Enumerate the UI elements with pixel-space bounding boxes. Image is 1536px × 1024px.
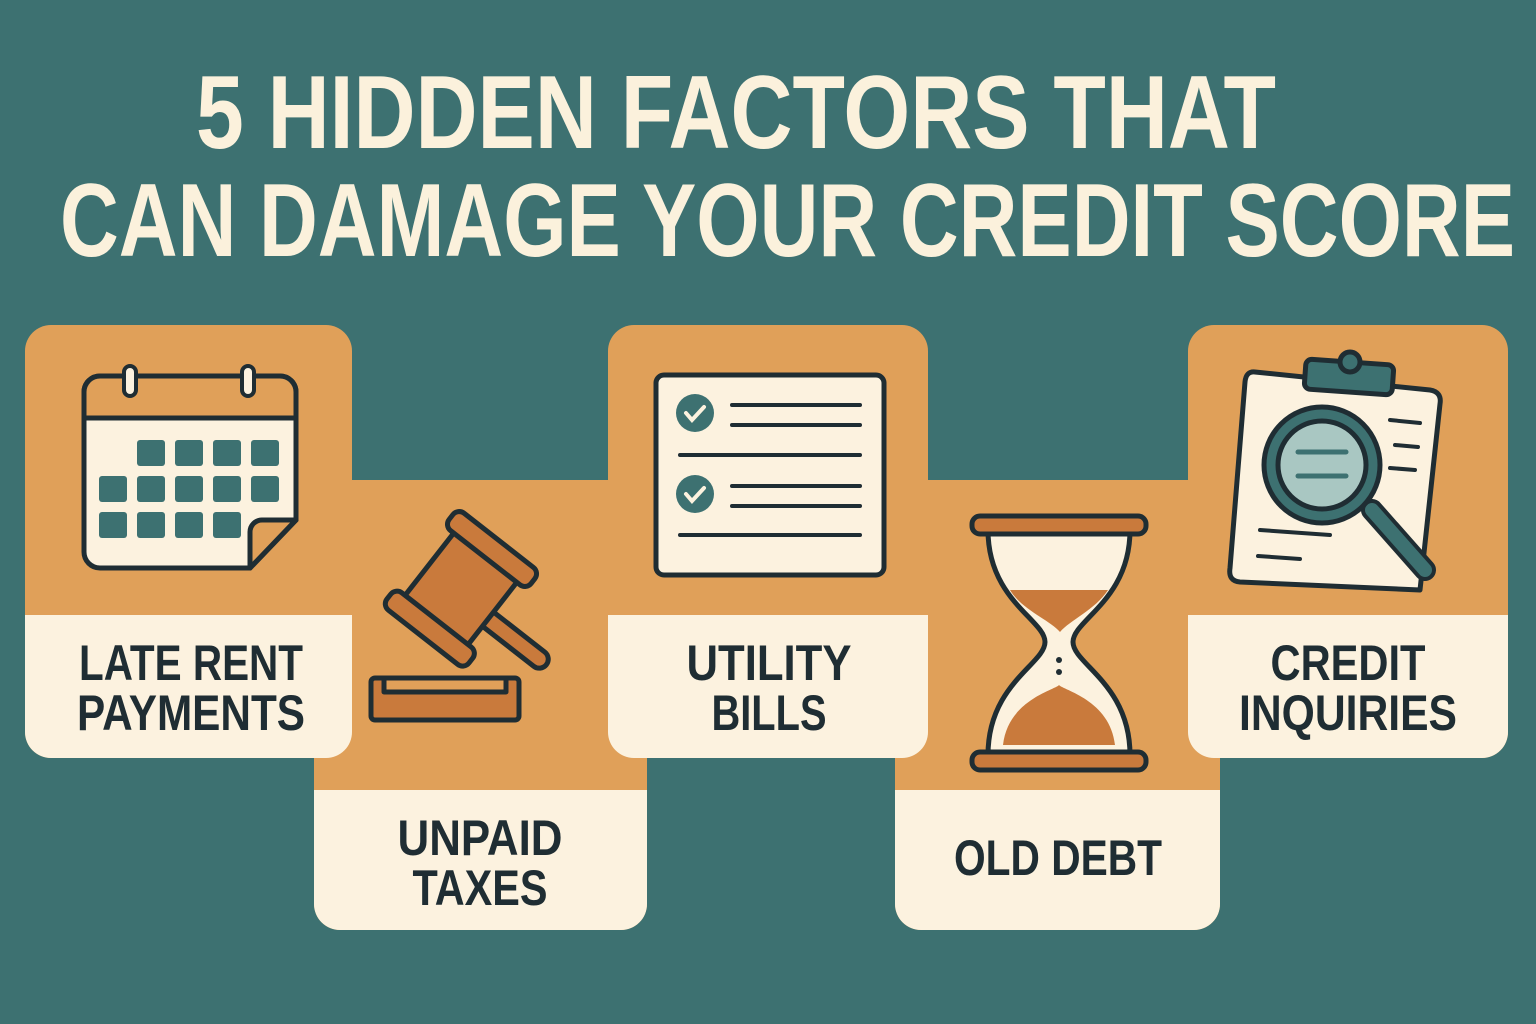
icon: clipboard with magnifier [1230,352,1440,590]
label: utility bills [686,635,852,741]
panel: utility bills [608,325,928,758]
label: unpaid taxes: UNPAID [398,810,562,866]
label: late rent payments: LATE RENT [79,635,303,691]
label: credit inquiries: CREDIT [1270,635,1426,691]
title: 5 HIDDEN FACTORS THAT [196,55,1276,171]
icon: calendar [84,366,296,568]
label: old debt: OLD DEBT [954,830,1162,886]
panel: old debt [895,480,1220,930]
label: late rent payments: PAYMENTS [77,685,305,741]
icon: checklist [656,375,884,575]
panel: credit inquiries [1188,325,1508,758]
label: late rent payments [77,635,305,741]
label: unpaid taxes [398,810,562,916]
icon: gavel [371,508,552,720]
panel: late rent payments [25,325,352,758]
icon: hourglass [972,516,1146,770]
panel: unpaid taxes [314,480,647,930]
label: unpaid taxes: TAXES [412,860,548,916]
label: credit inquiries [1239,635,1457,741]
label: credit inquiries: INQUIRIES [1239,685,1457,741]
label: utility bills: BILLS [712,685,826,741]
label: utility bills: UTILITY [686,635,852,691]
title [60,55,1515,279]
